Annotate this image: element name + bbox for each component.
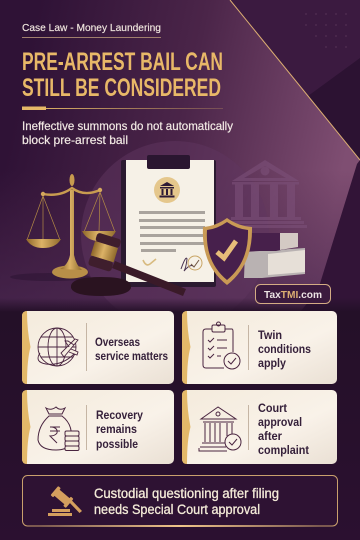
- card: court approval: after: [258, 429, 282, 443]
- card: recovery: possible: [96, 437, 138, 451]
- subtitle: [22, 119, 233, 147]
- title: PRE-ARREST BAIL CAN: [22, 48, 223, 76]
- title: STILL BE CONSIDERED: [22, 74, 221, 102]
- subtitle: block pre-arrest bail: [22, 133, 128, 147]
- card: court approval: [182, 390, 337, 464]
- card: twin conditions: apply: [258, 356, 286, 370]
- card: twin conditions: Twin: [258, 328, 282, 342]
- clipboard document: [121, 155, 216, 287]
- card: recovery: Recovery: [96, 408, 143, 422]
- icon: globe with plane: [38, 328, 78, 366]
- icon: checklist: [203, 322, 240, 369]
- card: twin conditions: conditions: [258, 342, 311, 356]
- gavel: [71, 232, 186, 296]
- subtitle: Ineffective summons do not automatically: [22, 119, 233, 133]
- icon: courthouse with check: [199, 407, 241, 451]
- card: overseas service: Overseas: [95, 335, 140, 349]
- card: overseas service: [22, 311, 174, 384]
- card: recovery: [22, 390, 174, 464]
- scales of justice: [10, 174, 116, 281]
- banner: custodial questioning: [22, 476, 338, 527]
- icon: money bag with coins: [38, 407, 79, 450]
- card: court approval: complaint: [258, 443, 309, 457]
- shield: [203, 218, 252, 285]
- card: recovery: remains: [96, 422, 137, 436]
- brand pill: [256, 284, 330, 304]
- banner: custodial questioning: Custodial questioning after filing: [94, 486, 279, 501]
- eyebrow: case law label: Case Law - Money Laundering: [22, 22, 161, 34]
- books: [244, 233, 305, 278]
- card: twin conditions: [182, 311, 337, 384]
- watermark: courthouse: [225, 160, 307, 228]
- banner: custodial questioning: needs Special Court approval: [94, 502, 260, 517]
- title rule: [22, 106, 223, 110]
- card: court approval: approval: [258, 415, 302, 429]
- card: court approval: Court: [258, 401, 287, 415]
- title: [22, 48, 223, 102]
- icon: gavel: [48, 486, 82, 516]
- brand pill: TaxTMI.com: [264, 289, 322, 301]
- card: overseas service: service matters: [95, 349, 168, 363]
